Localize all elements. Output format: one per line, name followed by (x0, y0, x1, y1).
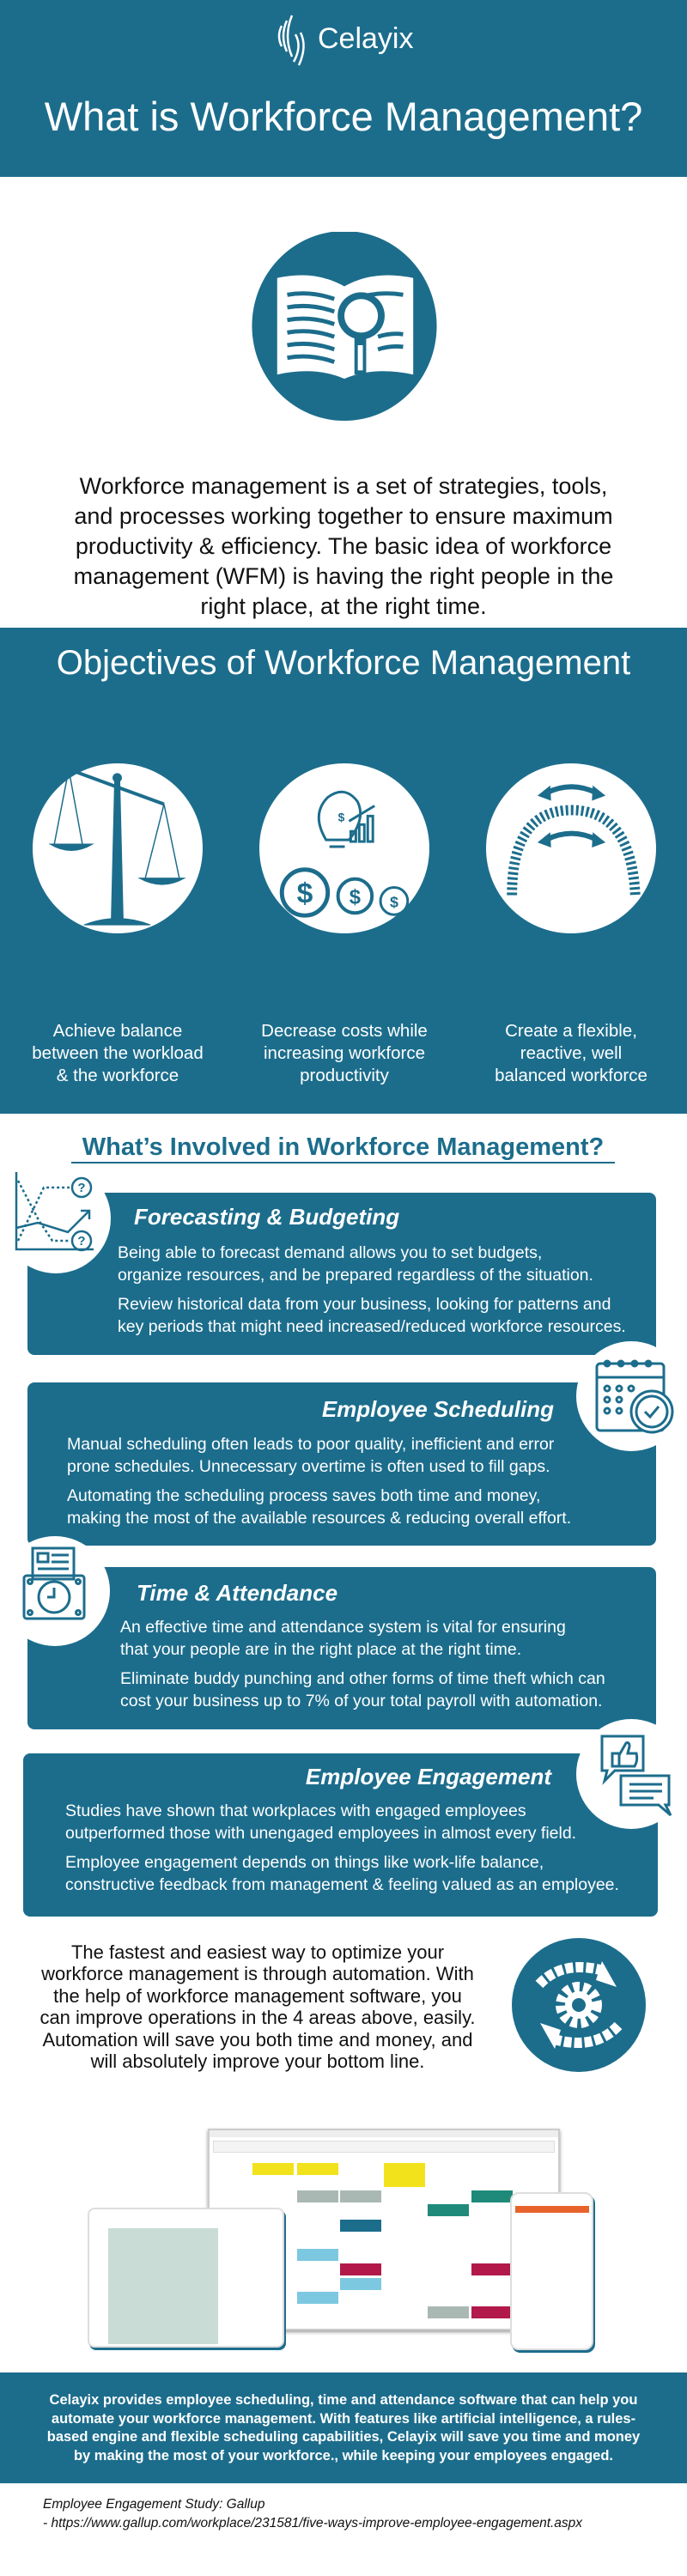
automation text: the help of workforce management software, you (53, 1985, 462, 2007)
scheduling body: prone schedules. Unnecessary overtime is often used to fill gaps. (67, 1457, 550, 1476)
objective 1 text: between the workload (32, 1043, 204, 1063)
engagement title: Employee Engagement (306, 1764, 551, 1789)
engagement body (65, 1801, 619, 1894)
time body (120, 1618, 605, 1710)
scheduling body: Automating the scheduling process saves both time and money, (67, 1486, 540, 1505)
heading: what's involved: What’s Involved in Workforce Management? (82, 1133, 604, 1161)
panel: objectives (0, 628, 687, 1114)
footer text: based engine and flexible scheduling capabilities, Celayix will save you time and money (47, 2429, 640, 2445)
icon: thumbs up chat (576, 1719, 686, 1829)
engagement body: Employee engagement depends on things like work-life balance, (65, 1853, 544, 1872)
automation text: Automation will save you both time and money, and (43, 2029, 472, 2050)
forecasting title: Forecasting & Budgeting (134, 1204, 399, 1230)
panel: scheduling (27, 1382, 656, 1546)
panel: forecasting (27, 1193, 656, 1355)
forecasting body: key periods that might need increased/reduced workforce resources. (118, 1317, 626, 1336)
automation text: will absolutely improve your bottom line. (91, 2050, 424, 2072)
automation text: can improve operations in the 4 areas above, easily. (40, 2007, 476, 2028)
forecasting body: organize resources, and be prepared regardless of the situation. (118, 1266, 593, 1285)
intro paragraph: productivity & efficiency. The basic idea of workforce (76, 533, 611, 559)
icon: costs: $ (390, 893, 398, 910)
logo: Celayix (318, 22, 413, 55)
source citation (43, 2497, 582, 2530)
scheduling title: Employee Scheduling (322, 1396, 554, 1422)
icon: book with magnifier (252, 232, 437, 421)
phone (510, 2192, 593, 2350)
scheduling body: Manual scheduling often leads to poor quality, inefficient and error (67, 1435, 554, 1454)
automation text (40, 1941, 476, 2072)
footer text: automate your workforce management. With features like artificial intelligence, a rules- (52, 2411, 635, 2427)
engagement body: outperformed those with unengaged employees in almost every field. (65, 1824, 576, 1843)
footer text: Celayix provides employee scheduling, time and attendance software that can help you (50, 2392, 637, 2408)
monitor (208, 2129, 560, 2330)
objective 1 text: & the workforce (57, 1066, 179, 1085)
icon: costs (259, 763, 429, 933)
icon: automation gear (512, 1938, 646, 2072)
engagement body: Studies have shown that workplaces with engaged employees (65, 1801, 526, 1820)
automation text: workforce management is through automation. With (41, 1963, 474, 1984)
header band (0, 0, 687, 177)
time body: Eliminate buddy punching and other forms of time theft which can (120, 1669, 605, 1688)
automation text: The fastest and easiest way to optimize your (71, 1941, 444, 1963)
icon: forecasting chart: ? (77, 1234, 86, 1249)
objective 3 text: Create a flexible, (505, 1021, 637, 1041)
intro paragraph: Workforce management is a set of strategies, tools, (80, 473, 607, 499)
time title: Time & Attendance (137, 1580, 337, 1606)
forecasting body: Being able to forecast demand allows you to set budgets, (118, 1243, 542, 1262)
scheduling body: making the most of the available resources & reducing overall effort. (67, 1509, 571, 1528)
objective 1 text (32, 1021, 204, 1085)
scheduling body (67, 1435, 571, 1528)
objectives heading: Objectives of Workforce Management (57, 644, 630, 682)
forecasting body (118, 1243, 626, 1336)
objective 3 text: reactive, well (520, 1043, 622, 1063)
objective 3 text (495, 1021, 647, 1085)
tablet (88, 2208, 284, 2348)
time body: that your people are in the right place at the right time. (120, 1640, 521, 1659)
objective 2 text (261, 1021, 428, 1085)
panel: time & attendance (27, 1567, 656, 1729)
icon: forecasting chart: ? (77, 1181, 86, 1195)
icon: costs: $ (338, 810, 345, 823)
intro paragraph (74, 473, 613, 619)
footer text: by making the most of your workforce., while keeping your employees engaged. (74, 2448, 613, 2464)
footer text (47, 2392, 641, 2464)
time body: An effective time and attendance system is vital for ensuring (120, 1618, 566, 1637)
icon: costs: $ (350, 885, 361, 908)
title: What is Workforce Management? (45, 94, 642, 139)
forecasting body: Review historical data from your business, looking for patterns and (118, 1295, 611, 1314)
objective 2 text: Decrease costs while (261, 1021, 428, 1041)
time body: cost your business up to 7% of your total payroll with automation. (120, 1692, 602, 1710)
icon: calendar clock (576, 1341, 686, 1451)
source citation: - https://www.gallup.com/workplace/231581/five-ways-improve-employee-engagement.aspx (43, 2516, 582, 2530)
intro paragraph: management (WFM) is having the right people in the (74, 563, 613, 589)
engagement body: constructive feedback from management & feeling valued as an employee. (65, 1875, 619, 1894)
source citation: Employee Engagement Study: Gallup (43, 2497, 264, 2512)
software screenshots (88, 2128, 595, 2353)
objective 1 text: Achieve balance (53, 1021, 182, 1041)
intro paragraph: and processes working together to ensure maximum (74, 503, 613, 529)
footer band (0, 2372, 687, 2483)
panel: engagement (23, 1753, 658, 1917)
icon: forecasting chart (1, 1163, 111, 1273)
objective 2 text: productivity (300, 1066, 389, 1085)
objective 2 text: increasing workforce (264, 1043, 425, 1063)
icon: costs: $ (297, 878, 313, 909)
intro paragraph: right place, at the right time. (200, 593, 487, 619)
icon: flexible arch (486, 763, 656, 933)
icon: scales (33, 763, 203, 933)
objective 3 text: balanced workforce (495, 1066, 647, 1085)
logo (278, 15, 414, 65)
icon: time clock (0, 1536, 110, 1646)
